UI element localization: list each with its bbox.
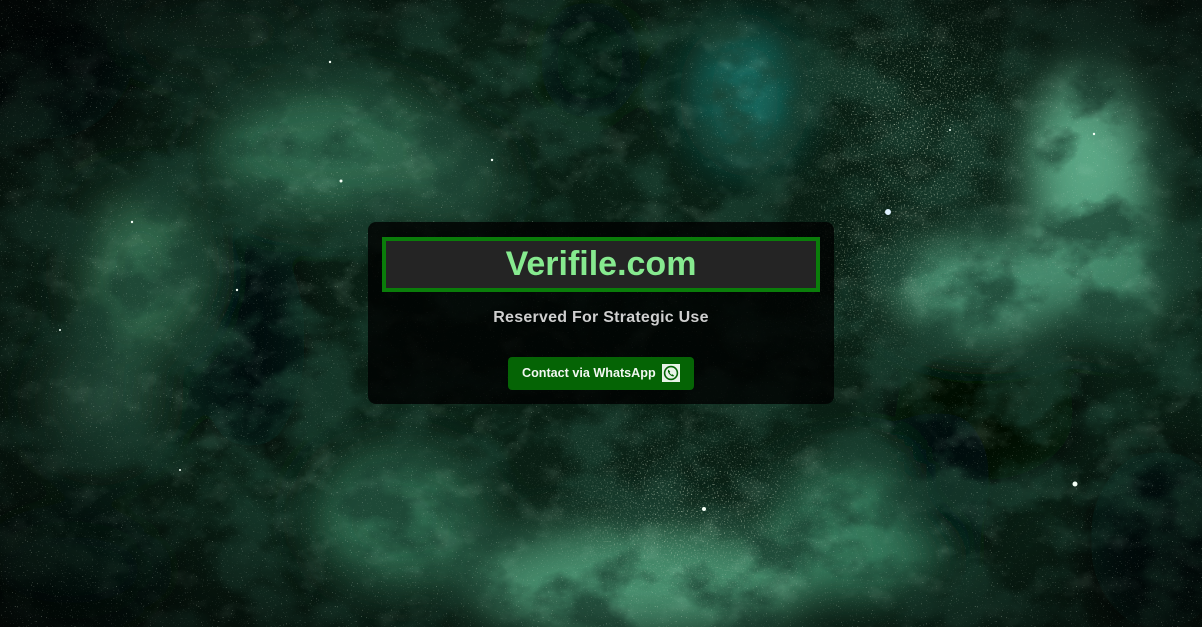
icon: WhatsApp — [662, 364, 680, 382]
panel: domain card — [368, 222, 834, 404]
button: contact via WhatsApp — [508, 357, 694, 390]
text: tagline: Reserved For Strategic Use — [493, 309, 709, 326]
heading: domain name: Verifile.com — [506, 245, 696, 283]
button: contact via WhatsApp: Contact via WhatsApp — [522, 366, 656, 380]
heading: domain name — [382, 237, 820, 292]
